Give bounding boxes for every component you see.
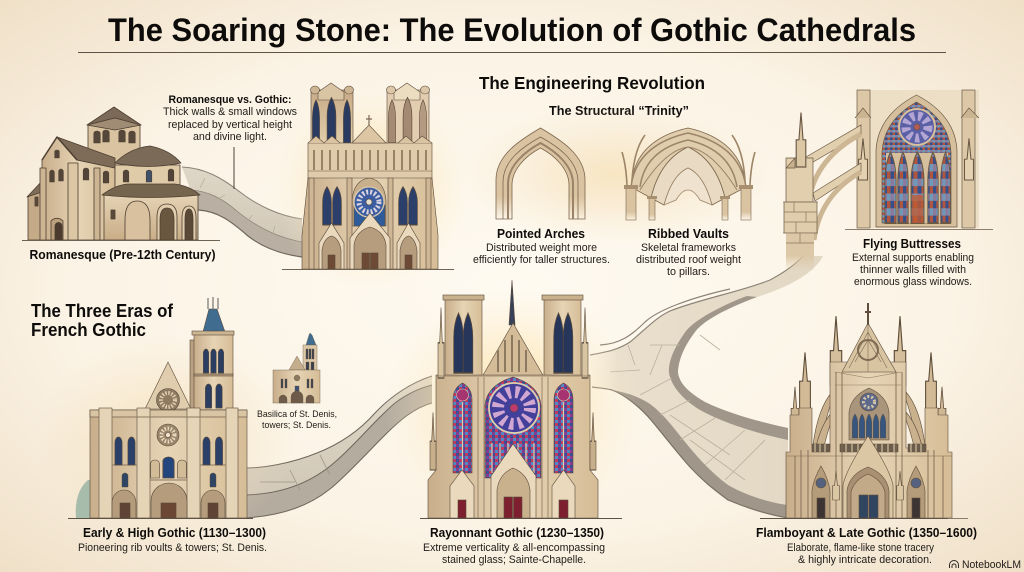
tree (76, 480, 91, 518)
caption: Early and High Gothic (78, 525, 267, 554)
label: Ribbed Vaults: distributed roof weight (636, 254, 741, 266)
Flamboyant Gothic cathedral illustration (786, 303, 952, 518)
icon: NotebookLM mark (950, 560, 958, 568)
label: Pointed Arches: Distributed weight more (486, 242, 597, 254)
ground line: Rayonnant (420, 518, 622, 519)
central window (485, 377, 541, 478)
caption: mini Basilica (257, 409, 337, 431)
ground line: Flamboyant (760, 518, 948, 519)
tracery quatrefoils (835, 372, 901, 385)
callout: Romanesque vs. Gothic: Thick walls & small windows (163, 106, 297, 118)
body (786, 362, 952, 518)
caption: Rayonnant Gothic (423, 525, 605, 566)
stained glass window (876, 95, 957, 227)
vertical piers (795, 372, 943, 518)
gable and upper rose (145, 362, 191, 412)
callout: Romanesque vs. Gothic: replaced by vertical height (168, 119, 292, 131)
label: Ribbed Vaults (636, 226, 741, 278)
heading: The Three Eras of French Gothic: French Gothic (31, 319, 146, 340)
Reims Gothic cathedral illustration (302, 83, 438, 269)
right tower (386, 83, 430, 145)
caption: Rayonnant Gothic: Extreme verticality & all-encompassing (423, 542, 605, 554)
buttresses (99, 408, 238, 518)
heading: The Three Eras of French Gothic: The Three Eras of (31, 300, 174, 321)
label: Ribbed Vaults: to pillars. (667, 266, 710, 278)
flying arcs (806, 125, 861, 240)
facade body (428, 375, 598, 518)
pilasters (309, 178, 431, 269)
Flying buttress illustration (783, 90, 979, 271)
glow behind arches (460, 105, 770, 245)
glow behind Rayonnant (385, 288, 641, 532)
road: Rayonnant to Flying Buttress and Flamboyant (590, 256, 823, 518)
ground line: Reims (282, 269, 454, 270)
towers (445, 297, 482, 377)
lower facade (302, 178, 438, 269)
road: Romanesque to Reims (182, 167, 302, 257)
label: Pointed Arches: Pointed Arches (497, 226, 585, 241)
gable (482, 323, 544, 377)
wall (857, 90, 979, 228)
ground line: Early Gothic (68, 518, 253, 519)
caption: Early and High Gothic: Pioneering rib voults & towers; St. Denis. (78, 542, 267, 554)
portal (843, 436, 893, 518)
caption: Flamboyant and Late Gothic: & highly intricate decoration. (798, 554, 932, 566)
side portals (812, 466, 830, 518)
side windows (323, 187, 331, 225)
left tower (310, 83, 354, 145)
caption: Flamboyant and Late Gothic (756, 525, 977, 566)
central portal (491, 444, 536, 518)
caption: Romanesque: Romanesque (Pre-12th Century) (30, 247, 216, 262)
small niche pinnacles (833, 471, 839, 500)
label: Ribbed Vaults: Skeletal frameworks (641, 242, 736, 254)
cornices (112, 417, 226, 480)
ground line: Romanesque (22, 240, 220, 241)
label: Pointed Arches: efficiently for taller structures. (473, 254, 610, 266)
ground line: Flying Buttress (845, 229, 993, 230)
rose tracery window (849, 388, 889, 440)
callout: Romanesque vs. Gothic: and divine light. (193, 131, 267, 143)
pier (783, 113, 818, 271)
label: Flying Buttresses: External supports enabling (852, 252, 974, 264)
windows (115, 437, 122, 465)
rose window (352, 178, 386, 226)
road: Early Gothic to Rayonnant (246, 376, 432, 518)
callout: Romanesque vs. Gothic: Romanesque vs. Gothic: (168, 94, 292, 106)
NotebookLM watermark: NotebookLM (962, 559, 1021, 571)
flyers (813, 392, 925, 450)
caption: Flamboyant and Late Gothic: Elaborate, flame-like stone tracery (787, 542, 934, 554)
side stained glass (453, 383, 472, 473)
outer pinnacles (791, 387, 799, 430)
tower (190, 297, 234, 410)
caption: Early and High Gothic: Early & High Gothic (1130–1300) (83, 525, 266, 540)
nave (42, 137, 115, 240)
lower apse (104, 194, 198, 240)
icon: pointed arch (496, 128, 585, 219)
label: Flying Buttresses: enormous glass windows. (854, 276, 972, 288)
central spire (509, 280, 515, 325)
lower rose (157, 424, 179, 446)
caption: Rayonnant Gothic: stained glass; Sainte-Chapelle. (442, 554, 586, 566)
main block (90, 410, 247, 518)
glow behind Reims (274, 90, 470, 290)
caption: mini Basilica: towers; St. Denis. (262, 420, 331, 431)
mini Basilica of St. Denis (273, 333, 320, 403)
portals (350, 213, 390, 269)
title: The Soaring Stone: The Evolution of Gothic Cathedrals (108, 12, 916, 48)
icon: ribbed vault (622, 128, 755, 220)
rose window (489, 383, 539, 433)
bell tower (88, 125, 140, 170)
callout leader (234, 147, 235, 189)
caption: Flamboyant and Late Gothic: Flamboyant & Late Gothic (1350–1600) (756, 525, 977, 540)
glow behind Early Gothic (35, 335, 295, 545)
heading: The Engineering Revolution: The Engineering Revolution (479, 73, 705, 93)
label: Flying Buttresses: Flying Buttresses (863, 236, 961, 251)
caption: Rayonnant Gothic: Rayonnant Gothic (1230–1350) (430, 525, 604, 540)
upper apse drum (115, 165, 180, 190)
left aisle (28, 185, 42, 240)
portals (112, 490, 136, 518)
Romanesque church illustration (27, 107, 200, 240)
gallery (308, 115, 432, 179)
gallery band (812, 444, 926, 452)
Early Gothic Basilica illustration (76, 297, 247, 518)
callout: Romanesque vs. Gothic (163, 94, 297, 143)
Rayonnant Gothic cathedral illustration (428, 280, 598, 518)
label: Flying Buttresses (852, 236, 974, 288)
gable (842, 323, 896, 372)
heading: The Three Eras of French Gothic (31, 300, 174, 340)
side portals (450, 470, 474, 518)
label: Flying Buttresses: thinner walls filled with (860, 264, 966, 276)
pinnacles (438, 308, 444, 378)
sub-heading: The Structural Trinity: The Structural “Trinity” (549, 104, 689, 118)
label: Ribbed Vaults: Ribbed Vaults (648, 226, 729, 241)
caption: mini Basilica: Basilica of St. Denis, (257, 409, 337, 420)
label: Pointed Arches (473, 226, 610, 266)
